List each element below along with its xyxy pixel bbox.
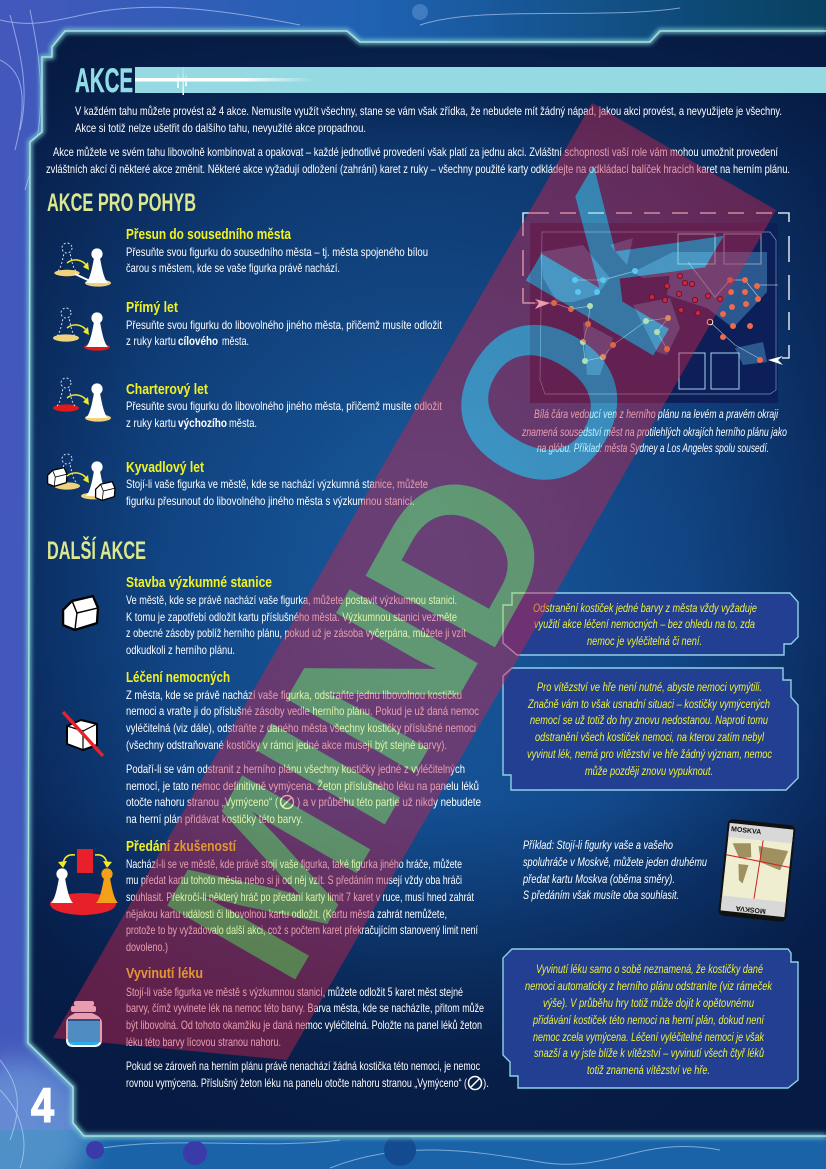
icon: cure jar — [66, 1001, 102, 1047]
action: Předání zkušeností: souhlasit. Překročí-li některý hráč po předání karty limit 7 karet v ruce, musí hned zahrát — [126, 890, 474, 904]
action: Přímý let: Přesuňte svou figurku do libovolného jiného města, přičemž musíte odložit — [126, 318, 443, 332]
icon: direct flight — [53, 308, 110, 351]
watermark: MINDOK over red triangle — [53, 103, 776, 1060]
icon: charter flight — [53, 378, 111, 422]
action: Vyvinutí léku: Vyvinutí léku — [126, 966, 203, 982]
callout: removing cubes — [503, 593, 798, 655]
action: Léčení nemocných: otočte nahoru stranou „Vymýceno“ ( — [126, 795, 278, 809]
action: Přesun do sousedního města: Přesun do sousedního města — [126, 227, 292, 243]
example text: Moskva: S předáním však musíte oba souhlasit. — [523, 888, 679, 902]
action: Charterový let: města. — [229, 416, 257, 430]
action: Předání zkušeností — [126, 839, 478, 954]
action: Charterový let — [126, 382, 443, 430]
action: Kyvadlový let: Stojí-li vaše figurka ve městě, kde se nachází výzkumná stanice, můžete — [126, 477, 428, 491]
action: Přímý let — [126, 300, 443, 348]
callout: removing cubes: nemoc je vyléčitelná či není. — [587, 634, 702, 648]
action: Předání zkušeností: nějakou kartu události či libovolnou kartu odložit. (Kartu města zahrát nemůžete, — [126, 907, 447, 921]
action: Kyvadlový let — [126, 460, 428, 508]
action: Léčení nemocných: vyléčitelná (viz dále), odstraňte z daného města všechny kostičky příslušné nemoci — [126, 721, 476, 735]
action: Přímý let: cílového — [178, 334, 218, 348]
action: Léčení nemocných: Podaří-li se vám odstranit z herního plánu všechny kostičky jedné z vyléčitelných — [126, 762, 465, 776]
action: Vyvinutí léku: rovnou vymýcena. Příslušný žeton léku na panelu otočte nahoru stranou „Vymýceno“ ( — [126, 1076, 467, 1090]
action: Vyvinutí léku: Pokud se zároveň na herním plánu právě nenachází žádná kostička této nemoci, je nemoc — [126, 1059, 480, 1073]
callout: removing cubes: Odstranění kostiček jedné barvy z města vždy vyžaduje — [533, 601, 757, 615]
watermark: MINDOK over red triangle: MIN — [119, 553, 525, 1015]
map illustration with dashed frame — [523, 213, 789, 403]
action: Léčení nemocných: nemoci a vraťte ji do příslušné zásoby vedle herního plánu. Pokud je už daná nemoc — [126, 704, 479, 718]
action: Kyvadlový let: figurku přesunout do libovolného jiného města s výzkumnou stanicí. — [126, 494, 415, 508]
icon: move to neighbouring city — [54, 243, 111, 287]
action: Přímý let: města. — [222, 334, 249, 348]
city card: Moskva: MOSKVA — [735, 904, 766, 914]
action: Charterový let: z ruky kartu — [126, 416, 176, 430]
callout: eradication: Pro vítězství ve hře není nutné, abyste nemoci vymýtili. — [537, 680, 762, 694]
action: Kyvadlový let: Kyvadlový let — [126, 460, 204, 476]
action: Přímý let: Přímý let — [126, 300, 178, 316]
icon: cure jar liquid — [68, 1019, 100, 1045]
watermark: MINDOK over red triangle: OK — [393, 135, 764, 535]
action: Vyvinutí léku: ). — [483, 1076, 489, 1090]
action: Stavba výzkumné stanice: odkudkoli z herního plánu. — [126, 643, 235, 657]
heading: Akce pro pohyb: AKCE PRO POHYB — [47, 189, 196, 217]
action: Léčení nemocných: Léčení nemocných — [126, 670, 230, 686]
action: Stavba výzkumné stanice: Ve městě, kde se právě nachází vaše figurka, můžete postavit výzkumnou stanici. — [126, 593, 457, 607]
icon: treat disease cube — [63, 712, 103, 756]
action: Léčení nemocných — [126, 670, 481, 826]
action: Přímý let: z ruky kartu — [126, 334, 176, 348]
action: Stavba výzkumné stanice: z obecné zásoby poblíž herního plánu, pokud už je zásoba vyčerpána, můžete ji vzít — [126, 626, 467, 640]
callout: eradication — [503, 668, 798, 790]
page number: 4 — [31, 1080, 54, 1133]
city card: Moskva: MOSKVA — [731, 826, 762, 836]
example text: Moskva — [522, 838, 707, 902]
intro text: Akce si totiž nelze ušetřit do dalšího tahu, nevyužité akce propadnou. — [75, 121, 366, 135]
callout: eradication: může později znovu vypuknout. — [585, 764, 713, 778]
action: Léčení nemocných: Z města, kde se právě nachází vaše figurka, odstraňte jednu libovolnou kostičku — [126, 688, 462, 702]
callout: cure: totiž znamená vítězství ve hře. — [587, 1063, 710, 1077]
callout: cure — [503, 949, 798, 1088]
action: Předání zkušeností: dovoleno.) — [126, 940, 168, 954]
heading: Další akce: DALŠÍ AKCE — [47, 535, 146, 565]
action: Charterový let: Přesuňte svou figurku do libovolného jiného města, přičemž musíte odložit — [126, 399, 443, 413]
callout: cure: přidávání kostiček této nemoci na herní plán, dokud není — [532, 1013, 765, 1027]
icon: research station — [63, 596, 98, 630]
action: Stavba výzkumné stanice: Stavba výzkumné stanice — [126, 575, 272, 591]
action: Vyvinutí léku — [126, 966, 489, 1090]
action: Stavba výzkumné stanice: K tomu je zapotřebí odložit kartu příslušného města. Výzkumnou stanici vezměte — [126, 610, 457, 624]
map caption — [521, 407, 787, 455]
action: Předání zkušeností: protože to by vyžadovalo další akci, což s počtem karet překračujícím stanovený limit není — [126, 923, 478, 937]
action: Charterový let: výchozího — [178, 416, 227, 430]
title: AKCE with bar — [75, 62, 826, 100]
action: Stavba výzkumné stanice — [126, 575, 467, 657]
action: Přesun do sousedního města: Přesuňte svou figurku do sousedního města – tj. města spojeného bílou — [126, 245, 428, 259]
icon: share knowledge — [50, 849, 118, 915]
example text: Moskva: spoluhráče v Moskvě, můžete jeden druhému — [523, 855, 707, 869]
action: Léčení nemocných: nemocí, je tato nemoc definitivně vymýcena. Žeton příslušného léku na panelu léků — [126, 778, 479, 793]
action: Předání zkušeností: Předání zkušeností — [126, 839, 237, 855]
action: Předání zkušeností: Nachází-li se ve městě, kde právě stojí vaše figurka, také figurka jiného hráče, můžete — [126, 857, 462, 871]
title: AKCE with bar: AKCE — [75, 62, 133, 100]
intro text — [46, 104, 790, 176]
action: Vyvinutí léku: barvy, čímž vyvinete lék na nemoc této barvy. Barva města, kde se nacházíte, přitom může — [126, 1001, 484, 1015]
watermark: MINDOK over red triangle: D — [317, 430, 604, 682]
example text: Moskva: Příklad: Stojí-li figurky vaše a vašeho — [523, 838, 673, 852]
action: Vyvinutí léku: být libovolná. Od tohoto okamžiku je daná nemoc vyléčitelná. Položte na panel léků žeton — [126, 1018, 482, 1032]
callout: removing cubes: využití akce léčení nemocných – bez ohledu na to, zda — [534, 617, 755, 631]
example text: Moskva: předat kartu Moskva (oběma směry). — [522, 872, 675, 886]
action: Léčení nemocných: na herní plán přidávat kostičky této barvy. — [126, 812, 303, 826]
action: Léčení nemocných: (všechny odstraňované kostičky v rámci jedné akce musejí být stejné barvy). — [126, 738, 447, 752]
callout: cure: výše). V průběhu hry totiž může dojít k opětovnému — [543, 996, 754, 1010]
action: Charterový let: Charterový let — [126, 382, 208, 398]
action: Přesun do sousedního města: čarou s městem, kde se vaše figurka právě nachází. — [126, 261, 340, 275]
action: Vyvinutí léku: léku této barvy lícovou stranou nahoru. — [126, 1035, 281, 1049]
action: Vyvinutí léku: Stojí-li vaše figurka ve městě s výzkumnou stanicí, můžete odložit 5 karet měst stejné — [126, 985, 463, 999]
action: Přesun do sousedního města — [126, 227, 428, 275]
icon: shuttle flight — [48, 454, 115, 500]
action: Předání zkušeností: mu předat kartu tohoto města nebo si ji od něj vzít. S předáním musejí vždy oba hráči — [126, 873, 462, 887]
city card: Moskva — [718, 819, 796, 922]
action: Léčení nemocných: ) a v průběhu této partie už nikdy nebudete — [297, 795, 481, 809]
